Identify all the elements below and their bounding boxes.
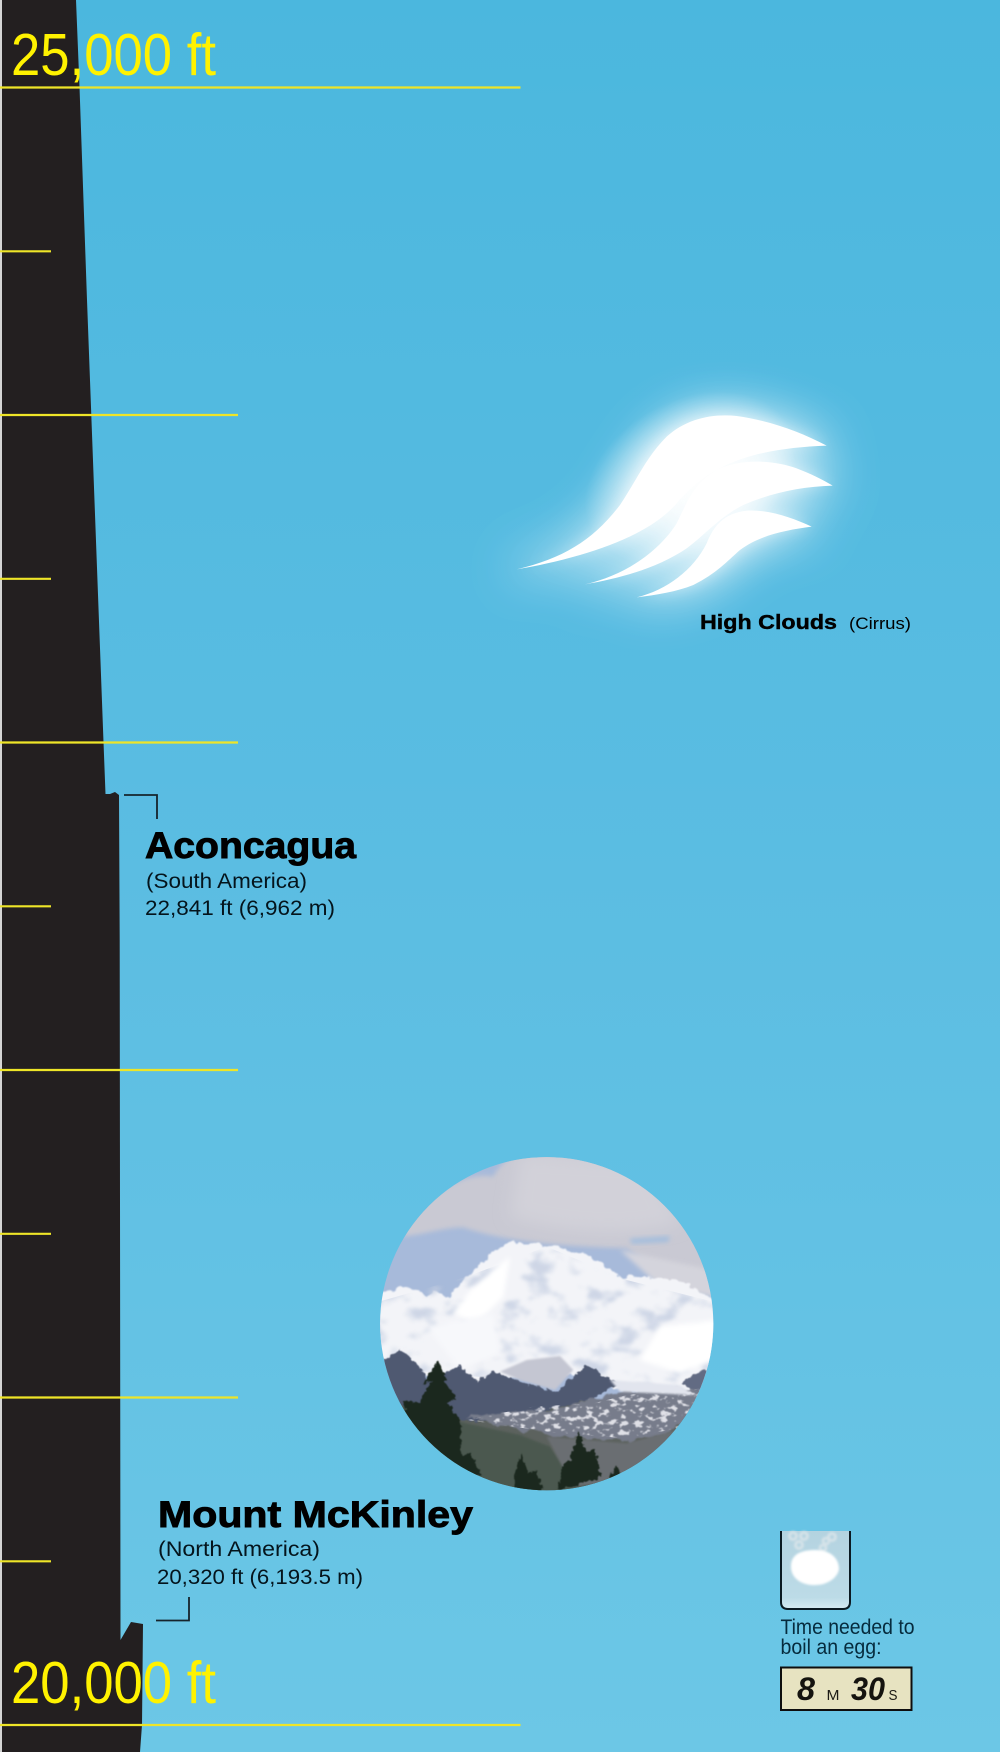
elevation: Aconcagua: 22,841 ft (6,962 m)	[145, 896, 335, 920]
steam bubbles	[790, 1532, 836, 1551]
callout: Mount McKinley	[156, 1494, 473, 1620]
leader bracket: Mount McKinley	[156, 1597, 189, 1620]
icon: beaker with boiling egg	[781, 1531, 850, 1609]
snow massif	[373, 1243, 720, 1400]
callout: Aconcagua	[124, 795, 356, 920]
heading: Aconcagua: Aconcagua	[145, 825, 356, 866]
altitude label: 20,000 ft: 20,000 ft	[11, 1650, 216, 1716]
label: high clouds: High Clouds	[700, 612, 837, 634]
continent: South America: (South America)	[146, 869, 307, 893]
digital timer: 8 m 30 s: M	[826, 1688, 840, 1704]
snow-speckled lower ridge	[463, 1388, 707, 1442]
leader bracket: Aconcagua	[124, 795, 157, 819]
digital timer: 8 m 30 s	[781, 1668, 912, 1710]
photo: Mount McKinley	[380, 1157, 714, 1490]
caption: time needed to boil an egg: boil an egg:	[780, 1636, 882, 1659]
label: high clouds: (Cirrus)	[849, 614, 911, 633]
digital timer: 8 m 30 s: S	[888, 1688, 898, 1704]
mountain silhouette	[0, 0, 143, 1752]
egg	[791, 1550, 839, 1585]
foreground hills	[401, 1404, 618, 1490]
icon: cirrus cloud	[517, 357, 833, 599]
altitude label: 25,000 ft: 25,000 ft	[11, 22, 216, 88]
caption: time needed to boil an egg: Time needed to	[780, 1616, 914, 1639]
continent: North America: (North America)	[158, 1537, 320, 1561]
caption: time needed to boil an egg	[780, 1616, 914, 1659]
digital timer: 8 m 30 s: 30	[851, 1671, 885, 1707]
heading: Mount McKinley: Mount McKinley	[158, 1494, 473, 1535]
dark ridge	[377, 1350, 713, 1422]
elevation: Mount McKinley: 20,320 ft (6,193.5 m)	[157, 1565, 363, 1589]
digital timer: 8 m 30 s: 8	[797, 1671, 815, 1707]
conifer trees	[403, 1360, 622, 1493]
altitude scale lines	[0, 88, 520, 1725]
grey cloud cover	[404, 1157, 708, 1280]
